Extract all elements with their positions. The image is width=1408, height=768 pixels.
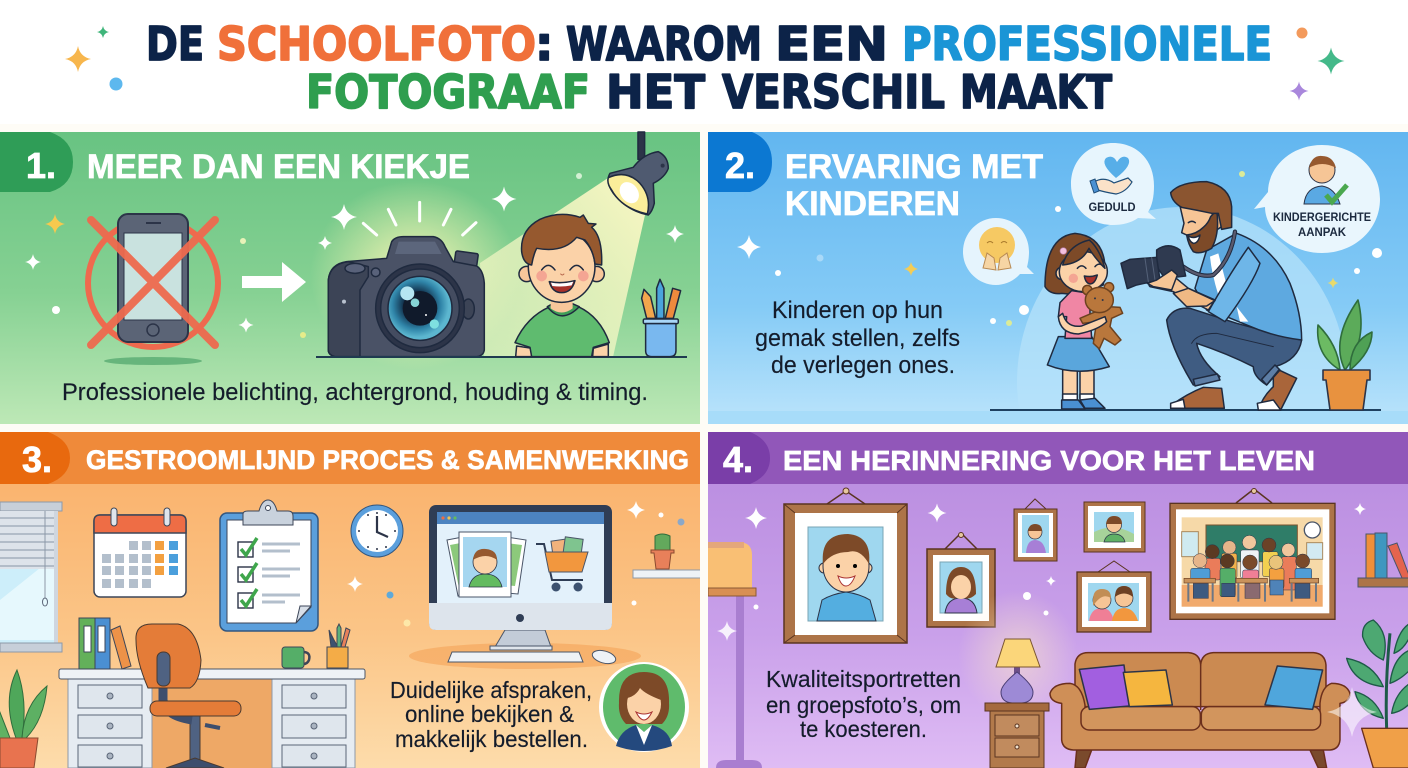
caption 2: Kinderen op hun [772,297,943,324]
heading 2: KINDEREN [785,185,960,223]
caption 3: makkelijk bestellen. [395,726,588,752]
title: SCHOOLFOTO [217,17,536,71]
title: MAAKT [960,65,1113,119]
mug and pens [282,624,350,668]
cushions [1079,665,1323,709]
sparkles 2 [737,171,1382,326]
icon: plant [1318,300,1372,410]
left plant [0,670,47,768]
number tab 2: 2. [725,145,755,186]
title: FOTOGRAAF [306,65,590,119]
sofa [1050,653,1350,768]
title: PROFESSIONELE [902,17,1272,71]
panel 1: meer dan een kiekje [0,132,700,424]
sparkles 4 [717,503,1377,737]
sparkles 1 [25,173,684,338]
table lamp [958,590,1078,720]
icon: crossed out phone [88,214,218,365]
sparkles 3 [347,501,684,626]
title decorations [65,26,1344,100]
title: VERSCHIL [722,65,945,119]
icon: lamp [608,132,668,215]
caption 4 [766,666,961,742]
caption 2: de verlegen ones. [771,352,955,379]
caption 4: en groepsfoto’s, om [766,692,961,718]
desk [59,669,365,768]
avatar: woman [599,662,689,752]
caption 2 [755,297,960,379]
frame: large boy portrait [784,488,907,643]
right plant [1347,620,1408,768]
figure: girl with teddy [1045,233,1123,409]
teddy bear [1080,283,1123,349]
heading 2 [786,154,1044,216]
icon: clock [351,505,403,557]
bubble: shy emoji [963,218,1034,285]
title: WAAROM [566,17,762,71]
binders [79,618,131,669]
caption 4: Kwaliteitsportretten [766,666,961,692]
caption 3: online bekijken & [405,701,574,727]
header band 4: 4. [723,439,753,480]
frame: boy landscape [1084,502,1145,552]
figure: photographer [1121,182,1302,410]
caption 1: Professionele belichting, achtergrond, houding & timing. [62,379,648,406]
icon: calendar [94,508,186,597]
title: DE [146,17,204,71]
keyboard and mouse [447,650,616,664]
caption 4: te koesteren. [800,716,927,742]
panel 3: gestroomlijnd proces [0,432,703,768]
title [146,17,1272,119]
figure: smiling boy [515,214,609,357]
header band 3: 3. [22,439,52,480]
chair [136,624,241,768]
heading 3: GESTROOMLIJND PROCES & SAMENWERKING [86,445,689,475]
floor lamp [708,542,762,768]
panel 4: een herinnering voor het leven [708,432,1408,768]
bubble: kindergerichte aanpak: AANPAK [1298,225,1346,239]
frame: girl portrait [927,532,995,627]
title: HET [606,65,706,119]
caption 2: gemak stellen, zelfs [755,325,960,352]
number tab 1: 1. [26,145,56,186]
frame: siblings [1077,561,1151,632]
bubble: geduld: GEDULD [1088,200,1136,214]
bubble: kindergerichte aanpak: KINDERGERICHTE [1273,210,1371,224]
heading 1: MEER DAN EEN KIEKJE [87,148,470,186]
number tab 2 [708,132,772,192]
panel 2: ervaring met kinderen [708,132,1408,424]
cart [536,537,588,592]
table line [316,356,687,358]
arrow [242,262,306,302]
icon: camera [328,202,484,357]
light beam [480,178,645,357]
header band 4 [708,432,1408,484]
heading 2: ERVARING MET [785,148,1043,186]
title: : [535,17,553,71]
ground line [990,409,1381,411]
heading 4: EEN HERINNERING VOOR HET LEVEN [783,445,1315,476]
title: EEN [775,17,888,71]
frame: class photo [1170,488,1335,619]
window [0,502,62,652]
dome [1017,207,1344,390]
wall books [1358,533,1408,587]
front photo [459,532,511,597]
camera glow [310,180,520,370]
icon: computer [409,505,641,669]
bubble: kindergerichte aanpak [1254,145,1380,253]
frame: small child [1014,499,1057,561]
caption 3: Duidelijke afspraken, [390,677,592,703]
icon: clipboard [220,500,318,631]
caption 3 [390,677,592,752]
header band 3 [0,432,700,484]
bubble: geduld [1071,143,1156,225]
wall shelf with cactus [633,534,703,578]
number tab 1 [0,132,73,192]
icon: pencil cup [642,279,681,357]
nightstand [985,703,1049,768]
